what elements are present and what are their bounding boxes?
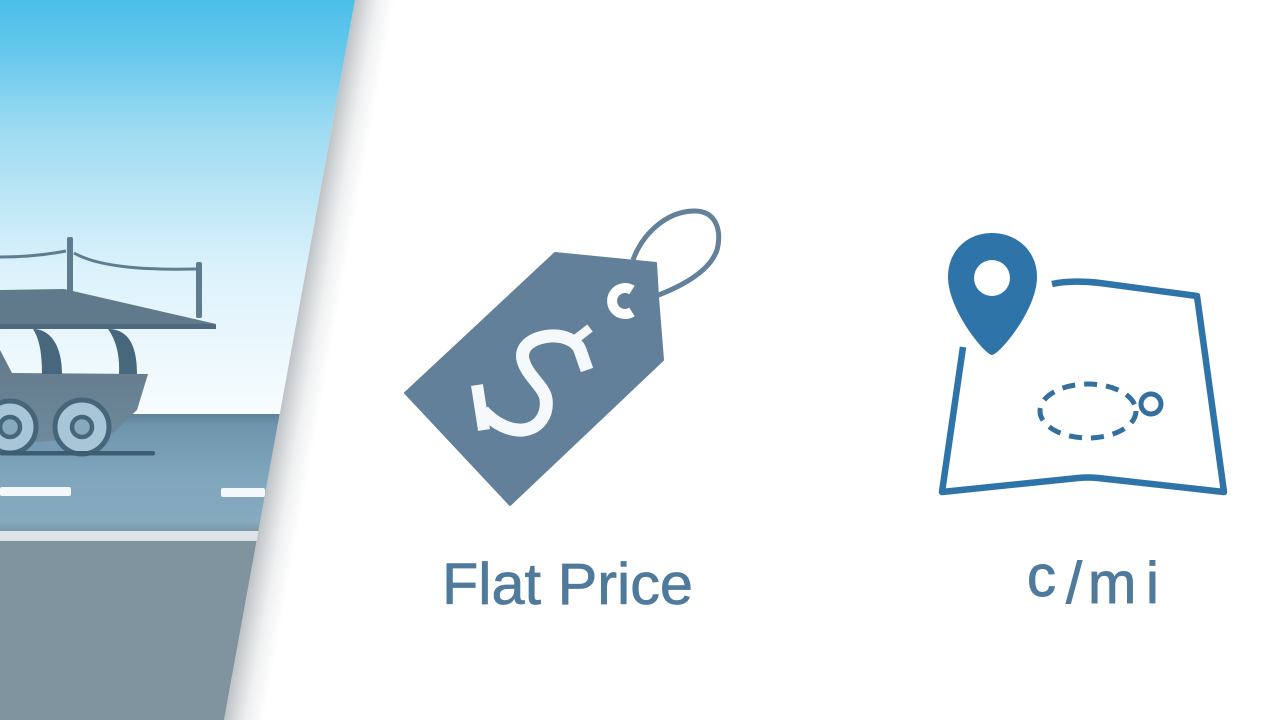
dashed route <box>1040 384 1136 438</box>
truck: car carrier <box>0 237 216 456</box>
truck body <box>0 350 148 442</box>
icon: map with pin <box>942 233 1224 492</box>
tag body <box>405 253 663 505</box>
panel shadow <box>224 0 395 720</box>
map outline <box>942 282 1224 492</box>
ground line <box>0 451 155 456</box>
road lane dashes <box>0 487 265 497</box>
upper deck <box>0 289 216 329</box>
tag string <box>633 211 719 296</box>
road <box>0 414 280 531</box>
location pin <box>948 233 1037 355</box>
window pillars <box>33 329 137 374</box>
icon: price tag <box>405 211 719 505</box>
wheels <box>0 400 109 454</box>
sky <box>0 0 356 415</box>
ground <box>0 541 256 720</box>
dollar symbol <box>477 328 590 430</box>
upper rails <box>0 251 196 269</box>
label: flat price: Flat Price <box>442 552 693 617</box>
route end marker <box>1141 394 1161 414</box>
left panel: car hauler on highway <box>0 0 356 720</box>
tag hole <box>612 288 632 314</box>
label: cents per mile: c <box>1027 544 1056 609</box>
label: cents per mile: /mi <box>1066 551 1159 616</box>
road edge strip <box>0 531 258 541</box>
